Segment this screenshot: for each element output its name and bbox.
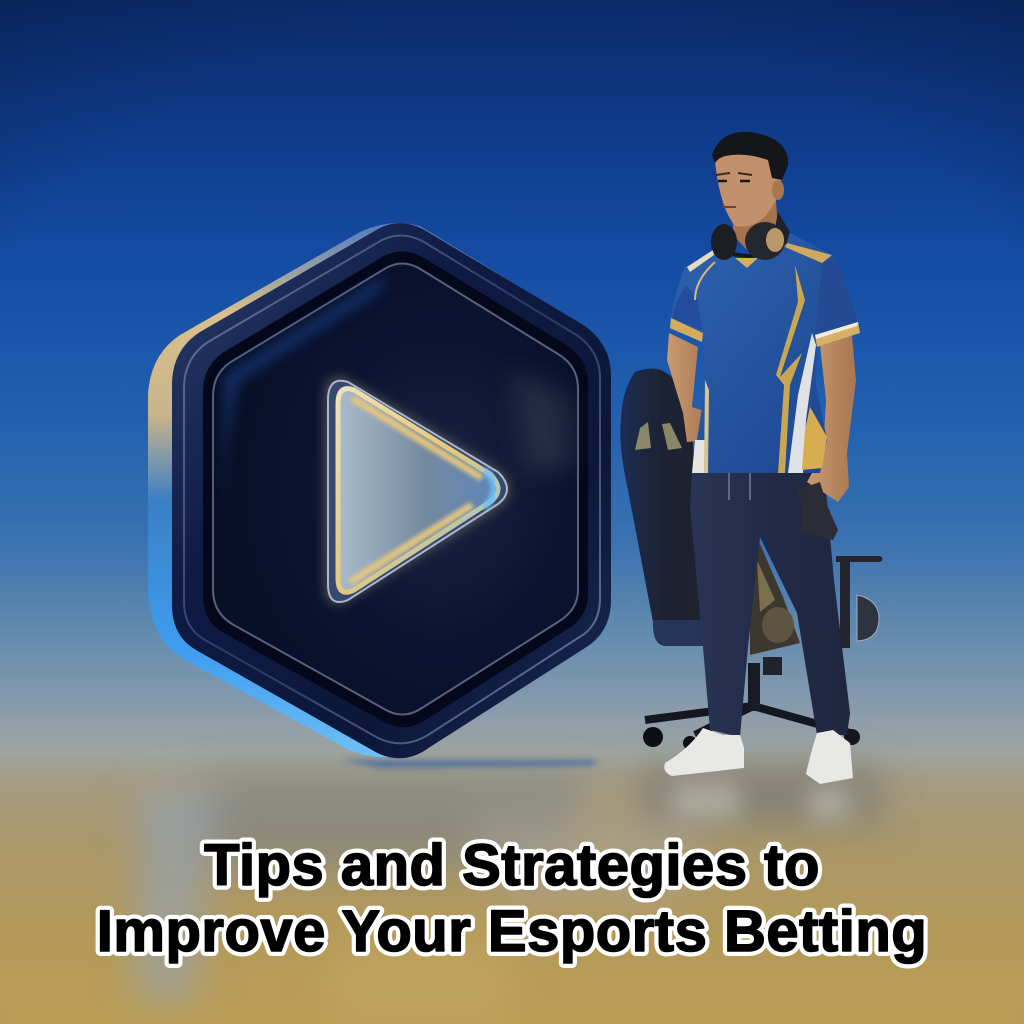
triangle gold highlights xyxy=(350,398,482,582)
chair seat cushion xyxy=(750,537,800,655)
floor reflections xyxy=(135,770,880,1024)
hexagon glowing side edge xyxy=(148,223,602,757)
jersey gold collar xyxy=(735,258,758,268)
icon: hexagon play badge xyxy=(148,223,611,758)
right shoe xyxy=(806,730,853,784)
left shoe xyxy=(664,728,744,776)
triangle halo rim xyxy=(328,381,507,602)
jersey left curve stripe xyxy=(695,262,715,300)
jersey sleeve cuffs xyxy=(815,322,860,347)
neck xyxy=(733,200,778,250)
jersey white shoulder xyxy=(687,250,714,272)
controller xyxy=(797,482,838,540)
title line 2: Improve Your Esports Betting xyxy=(97,899,927,964)
title line 2: Improve Your Esports Betting xyxy=(97,899,927,964)
inner face blue sheen xyxy=(222,275,386,520)
pants xyxy=(690,468,850,737)
title xyxy=(97,833,927,964)
jersey white panel xyxy=(788,333,816,473)
chair strap holes xyxy=(635,422,682,450)
play triangle xyxy=(325,377,509,604)
floor shadow under hexagon xyxy=(340,760,600,768)
inner face reflection xyxy=(510,370,572,470)
ear xyxy=(772,180,784,200)
jersey gold lightning stripe xyxy=(776,265,805,473)
player figure xyxy=(664,132,860,784)
triangle body xyxy=(338,389,498,592)
jersey gold panel xyxy=(802,407,827,470)
arm right xyxy=(807,335,856,502)
hexagon inner face xyxy=(213,263,578,715)
face features xyxy=(716,173,752,207)
shoe reflections xyxy=(672,782,850,820)
jersey sleeve shading xyxy=(816,258,858,335)
gaming chair xyxy=(620,368,882,750)
headphones xyxy=(711,212,790,260)
jersey gold shoulder xyxy=(785,243,832,263)
title line 1: Tips and Strategies to xyxy=(204,833,820,898)
arm left xyxy=(667,333,710,442)
jersey left white panel xyxy=(692,440,705,473)
jersey xyxy=(669,233,860,473)
hair xyxy=(712,132,788,180)
hexagon dark groove xyxy=(203,251,588,727)
hexagon outer body xyxy=(172,223,611,758)
title line 1: Tips and Strategies to xyxy=(204,833,820,898)
triangle blue highlights xyxy=(329,440,335,530)
chair back xyxy=(620,368,705,622)
hexagon rim highlight xyxy=(184,235,600,743)
chair armrest xyxy=(836,556,882,648)
head xyxy=(714,150,782,227)
triangle glow xyxy=(325,377,509,604)
chair seat xyxy=(653,620,705,646)
chair base xyxy=(645,706,850,735)
